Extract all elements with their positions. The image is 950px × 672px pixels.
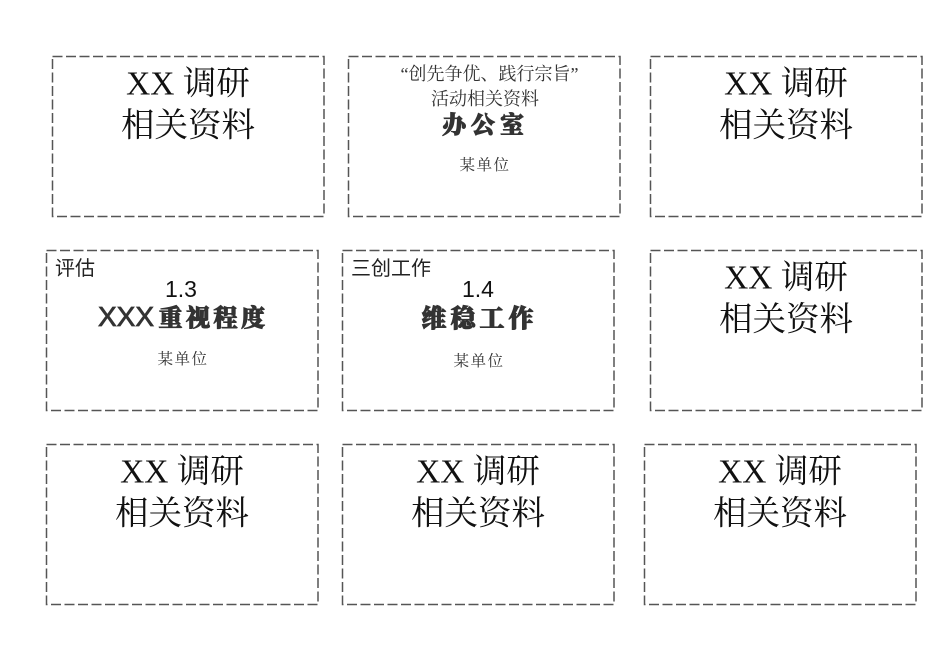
panel: XX research, row 1 column 1 bbox=[52, 56, 324, 216]
panel: XX research, row 3 column 2: 相关资料 bbox=[411, 496, 545, 532]
panel: XX research, row 2 column 3: XX 调研 bbox=[724, 260, 848, 296]
panel: office activity materials bbox=[348, 56, 620, 216]
panel: office activity materials: 办公室 bbox=[442, 105, 529, 140]
panel: office activity materials: 某单位 bbox=[459, 156, 511, 174]
panel: XX research, row 1 column 3: XX 调研 bbox=[724, 66, 848, 102]
panel: evaluation 1.3: 1.3 bbox=[165, 276, 197, 302]
panel: three creations work 1.4: 三创工作 bbox=[351, 257, 431, 280]
panel: evaluation 1.3: 重视程度 bbox=[158, 298, 268, 333]
panel: XX research, row 1 column 3: 相关资料 bbox=[719, 108, 853, 144]
panel: three creations work 1.4: 某单位 bbox=[453, 352, 505, 370]
panel: XX research, row 3 column 3: 相关资料 bbox=[713, 496, 847, 532]
panel: office activity materials: “创先争优、践行宗旨” bbox=[401, 64, 578, 84]
panel: XX research, row 3 column 3 bbox=[644, 444, 916, 604]
panel: XX research, row 3 column 1: 相关资料 bbox=[115, 496, 249, 532]
panel: XX research, row 3 column 1: XX 调研 bbox=[120, 454, 244, 490]
panel: XX research, row 2 column 3: 相关资料 bbox=[719, 302, 853, 338]
panel: three creations work 1.4 bbox=[342, 250, 614, 410]
panel: XX research, row 3 column 1 bbox=[46, 444, 318, 604]
panel: XX research, row 3 column 2: XX 调研 bbox=[416, 454, 540, 490]
panel: evaluation 1.3: 评估 bbox=[55, 257, 95, 280]
panel: office activity materials: 活动相关资料 bbox=[431, 89, 539, 109]
panel: evaluation 1.3 bbox=[46, 250, 318, 410]
panel: three creations work 1.4: 维稳工作 bbox=[421, 299, 538, 335]
panel: XX research, row 3 column 3: XX 调研 bbox=[718, 454, 842, 490]
panel: evaluation 1.3: XXX bbox=[98, 301, 154, 332]
panel: XX research, row 1 column 3 bbox=[650, 56, 922, 216]
panel: XX research, row 3 column 2 bbox=[342, 444, 614, 604]
panel: evaluation 1.3: 某单位 bbox=[157, 350, 209, 368]
panel: XX research, row 1 column 1: XX 调研 bbox=[126, 66, 250, 102]
panel: XX research, row 2 column 3 bbox=[650, 250, 922, 410]
panel: three creations work 1.4: 1.4 bbox=[462, 276, 494, 302]
panel: XX research, row 1 column 1: 相关资料 bbox=[121, 108, 255, 144]
